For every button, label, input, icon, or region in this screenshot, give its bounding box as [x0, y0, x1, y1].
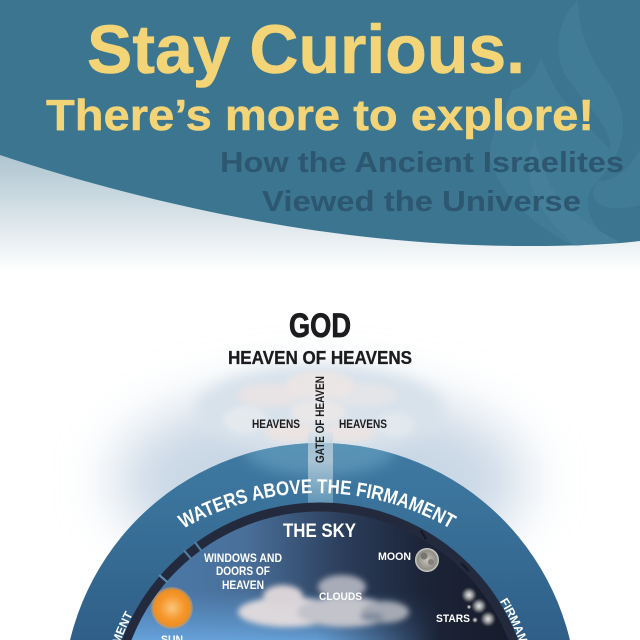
heavens glow and clouds — [115, 365, 525, 570]
header wave banner — [0, 0, 640, 246]
icon: moon — [415, 548, 439, 572]
label: Windows and doors of heaven: DOORS OF — [216, 566, 270, 578]
label: The Sky: THE SKY — [283, 521, 356, 542]
label: Clouds: CLOUDS — [319, 591, 362, 603]
light near gate — [245, 443, 395, 478]
label: Heavens left: HEAVENS — [252, 417, 300, 431]
clouds in sky — [238, 575, 409, 627]
icon: sun — [151, 587, 193, 629]
background wash under the wave — [0, 150, 640, 275]
gate of heaven column — [308, 432, 333, 503]
label: Waters above the firmament: WATERS ABOVE THE FIRMAMENT — [176, 479, 458, 528]
icon: flame watermark — [528, 140, 619, 246]
heading: Viewed the Universe: Viewed the Universe — [262, 186, 581, 218]
label: Heavens right: HEAVENS — [339, 417, 387, 431]
sky — [132, 512, 508, 640]
label: Stars: STARS — [436, 613, 470, 625]
label: Windows and doors of heaven: WINDOWS AND — [204, 553, 282, 565]
firmament dome: waters above — [63, 424, 577, 640]
heading: How the Ancient Israelites: How the Ancient Israelites — [220, 147, 624, 179]
label: Windows and doors of heaven — [204, 553, 282, 592]
subtitle: There's more to explore: There’s more to explore! — [46, 91, 594, 140]
title: Stay Curious: Stay Curious. — [87, 11, 525, 88]
label: Moon: MOON — [378, 551, 411, 563]
firmament dark band — [113, 507, 527, 640]
icon: stars — [461, 587, 496, 627]
label: Windows and doors of heaven: HEAVEN — [222, 580, 264, 592]
icon: windows and doors of heaven — [159, 531, 469, 582]
label: God: GOD — [289, 307, 351, 345]
label: Heaven of Heavens: HEAVEN OF HEAVENS — [228, 348, 412, 368]
label: Gate of Heaven: GATE OF HEAVEN — [313, 376, 327, 463]
